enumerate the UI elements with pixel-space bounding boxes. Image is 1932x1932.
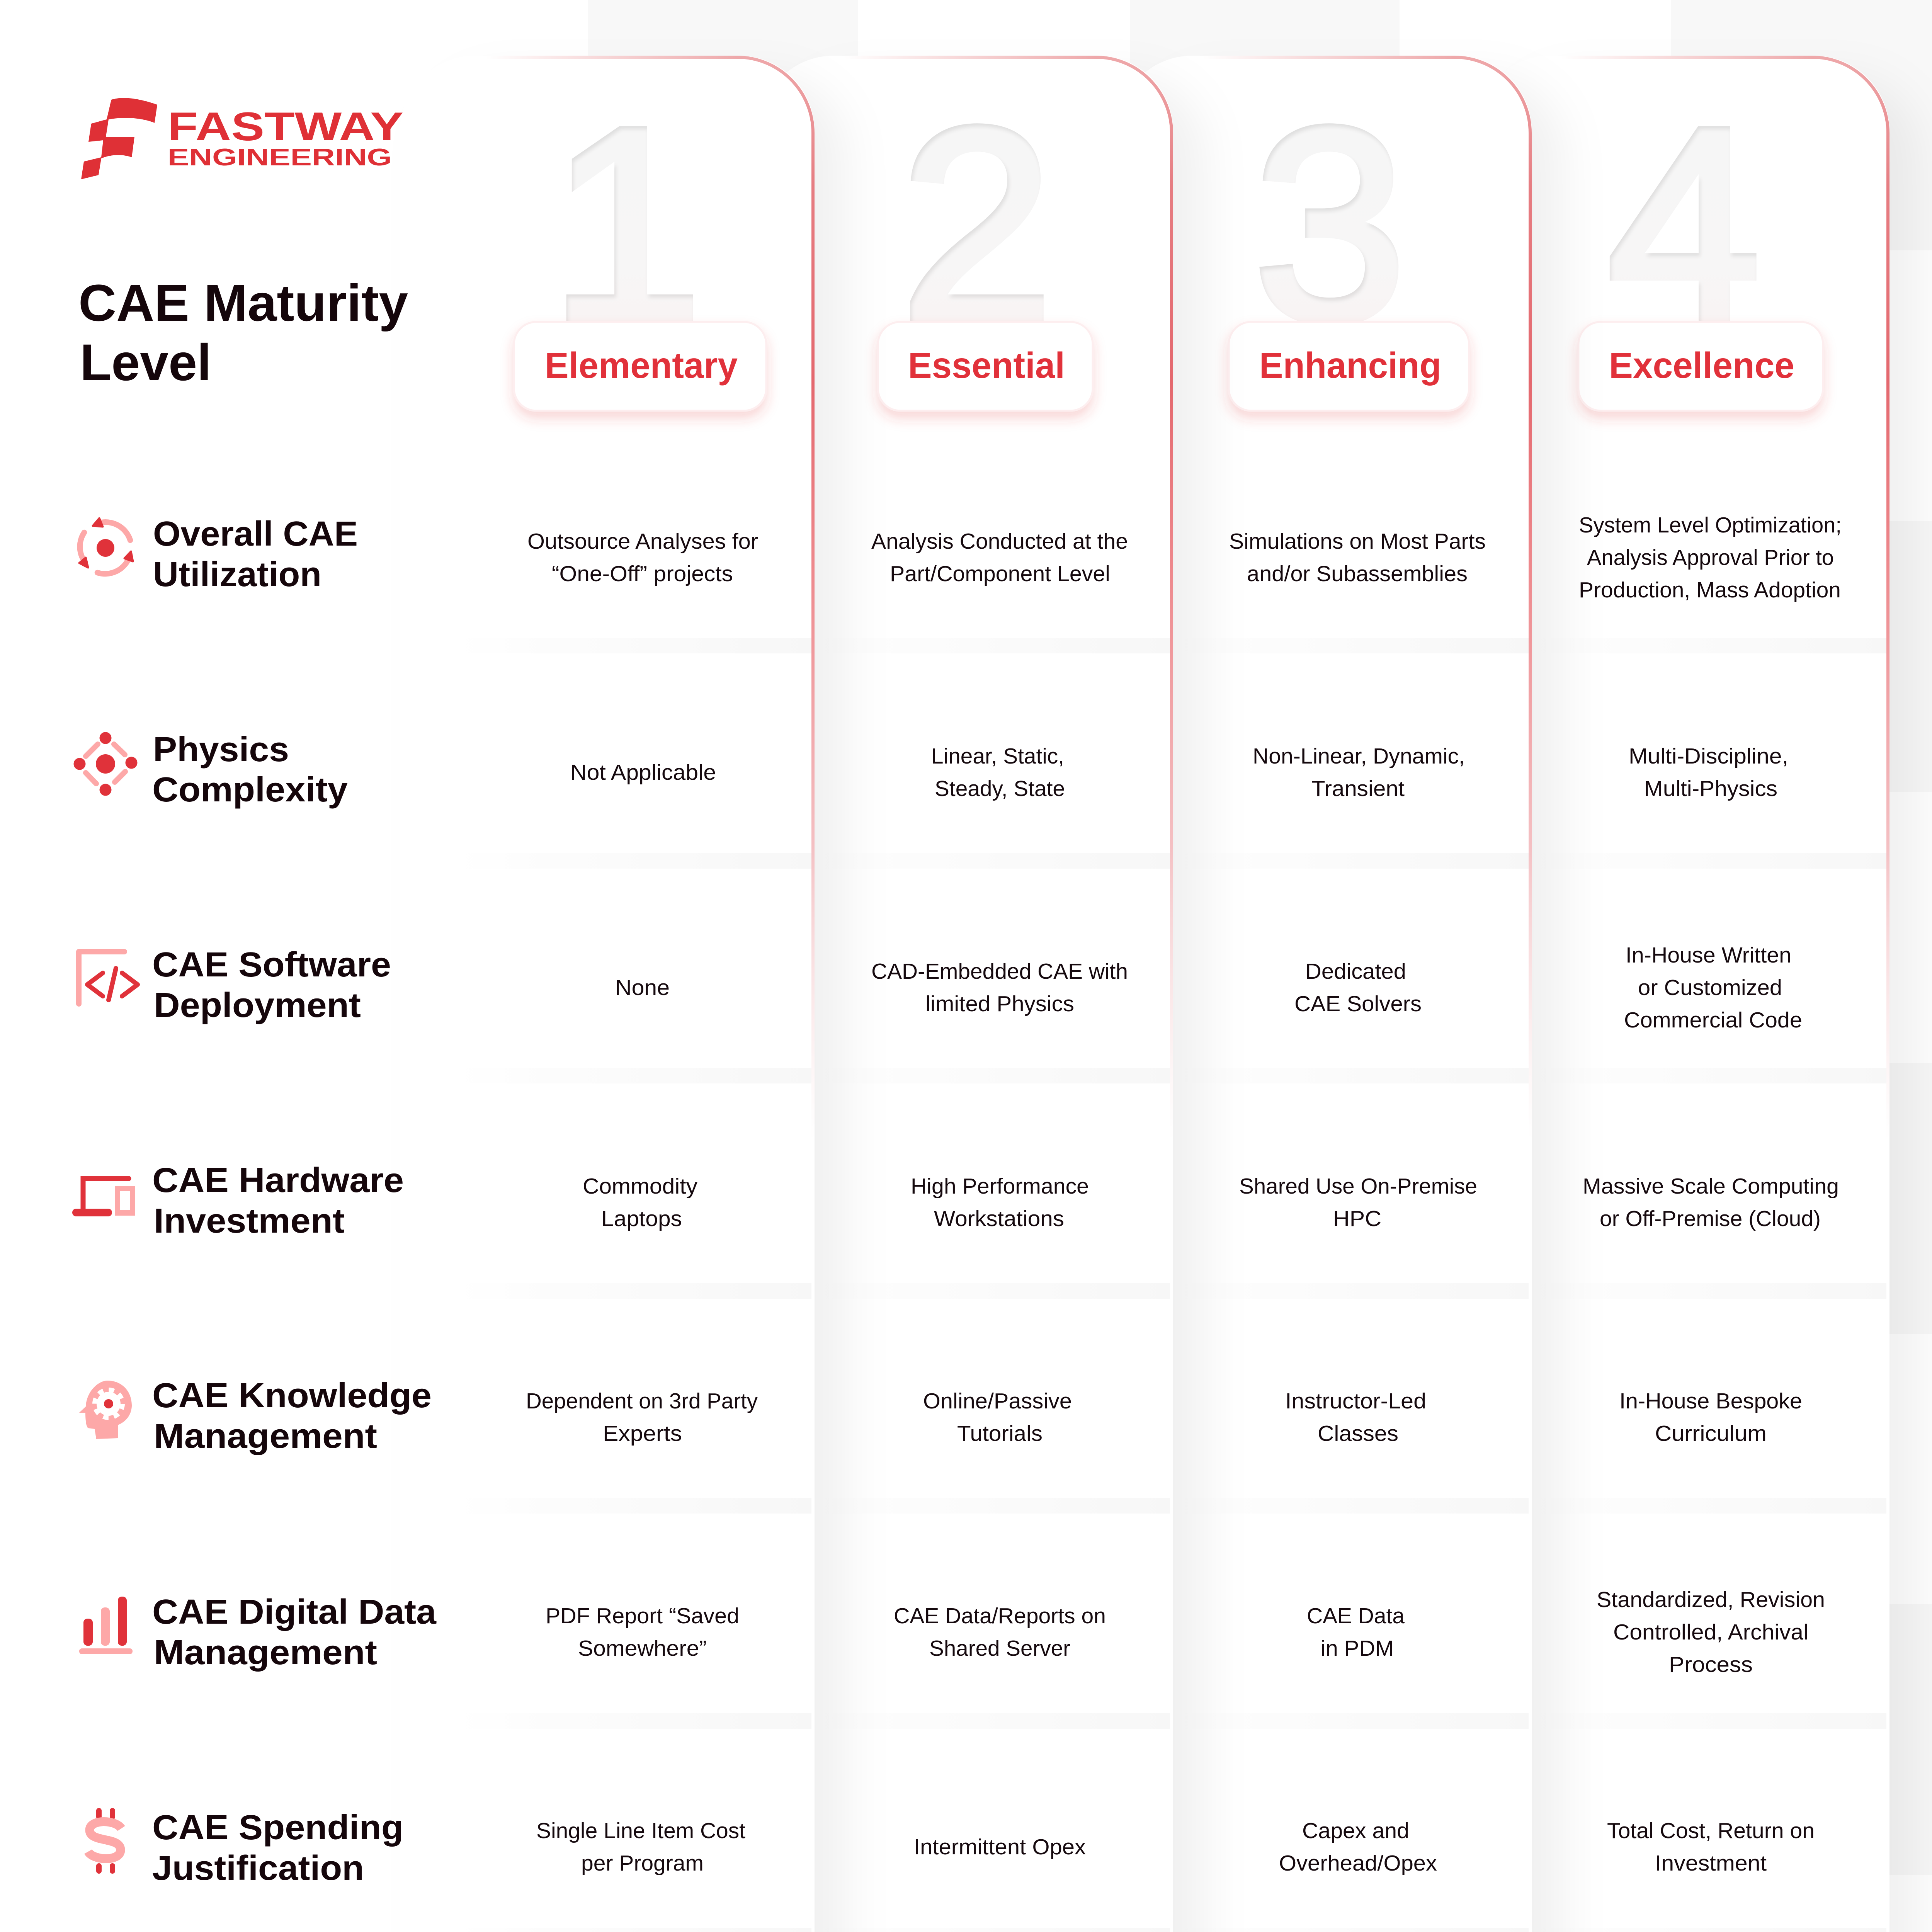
cell: elementary spending: Single Line Item Cost bbox=[536, 1818, 745, 1843]
icon: head with gear bbox=[79, 1381, 132, 1439]
cell: essential hardware bbox=[911, 1174, 1089, 1231]
label: CAE Hardware bbox=[152, 1161, 404, 1200]
cell: excellence utilization bbox=[1579, 513, 1842, 602]
cell: elementary utilization: “One-Off” projects bbox=[552, 561, 733, 586]
cell: excellence utilization: Analysis Approval Prior to bbox=[1587, 545, 1834, 570]
badge: Elementary: Elementary bbox=[545, 345, 738, 386]
cell: essential spending: Intermittent Opex bbox=[914, 1835, 1086, 1859]
cell: excellence data: Controlled, Archival bbox=[1613, 1620, 1808, 1645]
cell: elementary knowledge: Dependent on 3rd Party bbox=[526, 1389, 758, 1413]
cell: excellence data: Process bbox=[1669, 1652, 1753, 1677]
cell: excellence software: In-House Written bbox=[1626, 943, 1791, 968]
cell: excellence physics bbox=[1629, 744, 1788, 801]
cell: essential data: CAE Data/Reports on bbox=[894, 1604, 1106, 1628]
label: Physics bbox=[153, 730, 289, 769]
label bbox=[152, 1808, 403, 1888]
cell: enhancing data: CAE Data bbox=[1307, 1604, 1405, 1628]
badge: Elementary bbox=[514, 322, 766, 411]
cell: enhancing knowledge: Classes bbox=[1318, 1421, 1398, 1446]
cell: excellence physics: Multi-Discipline, bbox=[1629, 744, 1788, 769]
cell: essential knowledge bbox=[923, 1389, 1072, 1446]
cell: enhancing software bbox=[1294, 959, 1422, 1016]
row: Physics Complexity bbox=[73, 730, 348, 809]
icon: bar chart bbox=[79, 1597, 133, 1654]
label bbox=[152, 730, 348, 809]
cell: enhancing spending bbox=[1279, 1818, 1437, 1876]
label bbox=[153, 515, 358, 594]
cell: enhancing utilization: Simulations on Most Parts bbox=[1229, 529, 1486, 554]
cell: essential physics bbox=[931, 744, 1065, 801]
numeral 2: 2 bbox=[901, 71, 1053, 378]
panel: level 2 Essential column bbox=[759, 56, 1173, 1932]
title bbox=[78, 274, 408, 391]
icon: code window bbox=[79, 952, 138, 1004]
cell: elementary data: PDF Report “Saved bbox=[546, 1604, 739, 1628]
cell: excellence utilization: Production, Mass Adoption bbox=[1579, 578, 1841, 602]
cell: excellence data bbox=[1597, 1587, 1825, 1677]
label bbox=[152, 1376, 432, 1456]
cell: essential physics: Linear, Static, bbox=[931, 744, 1064, 769]
cell: enhancing utilization bbox=[1229, 529, 1486, 586]
cell: enhancing software: Dedicated bbox=[1305, 959, 1406, 984]
badge: Enhancing bbox=[1229, 322, 1469, 411]
row: CAE Spending Justification bbox=[88, 1808, 403, 1888]
label: CAE Spending bbox=[152, 1808, 403, 1847]
icon: flag bbox=[81, 98, 157, 179]
panel: level 1 Elementary column bbox=[400, 56, 815, 1932]
cell: enhancing utilization: and/or Subassemblies bbox=[1247, 561, 1468, 586]
label: CAE Knowledge bbox=[152, 1376, 432, 1415]
cell: enhancing data: in PDM bbox=[1321, 1636, 1394, 1661]
cell: enhancing physics: Non-Linear, Dynamic, bbox=[1253, 744, 1465, 769]
cell: essential data: Shared Server bbox=[929, 1636, 1070, 1661]
cell: elementary hardware bbox=[583, 1174, 698, 1231]
cell: essential knowledge: Tutorials bbox=[957, 1421, 1043, 1446]
cell: enhancing physics bbox=[1253, 744, 1465, 801]
cell: essential utilization bbox=[871, 529, 1128, 586]
badge: Essential bbox=[878, 322, 1093, 411]
cell: elementary data bbox=[546, 1604, 739, 1661]
cell: excellence hardware: Massive Scale Computing bbox=[1583, 1174, 1839, 1199]
cell: elementary spending: per Program bbox=[581, 1851, 704, 1876]
cell: excellence software bbox=[1624, 943, 1802, 1032]
cell: elementary spending bbox=[536, 1818, 745, 1876]
row: CAE Software Deployment bbox=[79, 946, 391, 1025]
badge: Enhancing: Enhancing bbox=[1259, 345, 1441, 386]
badge: Excellence bbox=[1578, 322, 1823, 411]
icon: cycle target bbox=[79, 518, 133, 574]
cell: excellence software: Commercial Code bbox=[1624, 1008, 1802, 1032]
cell: excellence utilization: System Level Optimization; bbox=[1579, 513, 1842, 537]
background checker pattern bbox=[588, 0, 1932, 1932]
card 1 background bbox=[400, 56, 815, 1932]
logo wordmark: ENGINEERING bbox=[168, 144, 392, 171]
cell: essential utilization: Part/Component Level bbox=[890, 561, 1110, 586]
cell: excellence hardware: or Off-Premise (Cloud) bbox=[1600, 1206, 1821, 1231]
cell: enhancing knowledge: Instructor-Led bbox=[1285, 1389, 1426, 1413]
label: CAE Software bbox=[152, 946, 391, 984]
label: Management bbox=[154, 1417, 377, 1456]
cell: enhancing hardware: HPC bbox=[1333, 1206, 1381, 1231]
numeral 3: 3 bbox=[1254, 71, 1406, 378]
label bbox=[152, 1593, 437, 1672]
cell: elementary knowledge bbox=[526, 1389, 758, 1446]
label: CAE Digital Data bbox=[152, 1593, 437, 1631]
panel: level 3 Enhancing column bbox=[1117, 56, 1532, 1932]
label: Management bbox=[154, 1633, 377, 1672]
cell: excellence physics: Multi-Physics bbox=[1644, 776, 1777, 801]
label: Investment bbox=[154, 1202, 345, 1240]
cell: elementary hardware: Commodity bbox=[583, 1174, 698, 1199]
cell: enhancing knowledge bbox=[1285, 1389, 1426, 1446]
label: Utilization bbox=[153, 555, 321, 594]
cell: enhancing software: CAE Solvers bbox=[1294, 992, 1422, 1016]
cell: excellence software: or Customized bbox=[1638, 975, 1782, 1000]
numeral 4: 4 bbox=[1608, 71, 1760, 378]
badge: Excellence: Excellence bbox=[1609, 345, 1794, 386]
cell: elementary hardware: Laptops bbox=[601, 1206, 682, 1231]
cell: enhancing data bbox=[1307, 1604, 1405, 1661]
icon: laptop and tablet bbox=[76, 1179, 133, 1213]
card 3 background bbox=[1117, 56, 1532, 1932]
cell: essential knowledge: Online/Passive bbox=[923, 1389, 1072, 1413]
cell: excellence hardware bbox=[1583, 1174, 1839, 1231]
label: Justification bbox=[152, 1849, 364, 1888]
cell: excellence data: Standardized, Revision bbox=[1597, 1587, 1825, 1612]
cell: excellence spending: Total Cost, Return on bbox=[1607, 1818, 1815, 1843]
cell: enhancing hardware bbox=[1239, 1174, 1477, 1231]
cell: elementary physics: Not Applicable bbox=[570, 760, 716, 785]
cell: essential hardware: High Performance bbox=[911, 1174, 1089, 1199]
cell: essential utilization: Analysis Conducted at the bbox=[871, 529, 1128, 554]
row: CAE Hardware Investment bbox=[76, 1161, 404, 1240]
cell: excellence spending: Investment bbox=[1655, 1851, 1767, 1876]
cell: excellence knowledge: Curriculum bbox=[1655, 1421, 1767, 1446]
cell: elementary software: None bbox=[615, 975, 670, 1000]
label bbox=[152, 1161, 404, 1240]
logo wordmark bbox=[168, 104, 403, 171]
cell: essential software: CAD-Embedded CAE with bbox=[871, 959, 1128, 984]
logo: Fastway Engineering bbox=[81, 98, 403, 179]
badge: Essential: Essential bbox=[908, 345, 1065, 386]
cell: enhancing spending: Overhead/Opex bbox=[1279, 1851, 1437, 1876]
cell: essential software bbox=[871, 959, 1128, 1016]
cell: essential physics: Steady, State bbox=[935, 776, 1065, 801]
cell: essential software: limited Physics bbox=[925, 992, 1074, 1016]
title: CAE Maturity bbox=[78, 274, 408, 332]
cell: elementary data: Somewhere” bbox=[578, 1636, 707, 1661]
cell: elementary knowledge: Experts bbox=[603, 1421, 682, 1446]
cell: essential data bbox=[894, 1604, 1106, 1661]
logo wordmark: FASTWAY bbox=[168, 104, 403, 149]
panel: level 4 Excellence column bbox=[1475, 56, 1889, 1932]
row: CAE Knowledge Management bbox=[79, 1376, 432, 1456]
row: CAE Digital Data Management bbox=[79, 1593, 437, 1672]
label bbox=[152, 946, 391, 1025]
cell: excellence spending bbox=[1607, 1818, 1815, 1876]
title: Level bbox=[80, 334, 211, 391]
label: Overall CAE bbox=[153, 515, 358, 553]
cell: excellence knowledge bbox=[1619, 1389, 1802, 1446]
card 4 background bbox=[1475, 56, 1889, 1932]
cell: excellence knowledge: In-House Bespoke bbox=[1619, 1389, 1802, 1413]
cell: elementary utilization: Outsource Analyses for bbox=[527, 529, 758, 554]
numeral 1: 1 bbox=[550, 71, 702, 378]
label: Deployment bbox=[154, 986, 361, 1025]
icon: dollar bbox=[88, 1811, 121, 1871]
label: Complexity bbox=[152, 770, 348, 809]
cell: enhancing spending: Capex and bbox=[1302, 1818, 1409, 1843]
icon: network diamond bbox=[73, 732, 138, 796]
cell: enhancing physics: Transient bbox=[1311, 776, 1405, 801]
cell: essential hardware: Workstations bbox=[934, 1206, 1064, 1231]
cell: enhancing hardware: Shared Use On-Premise bbox=[1239, 1174, 1477, 1199]
cell: elementary utilization bbox=[527, 529, 758, 586]
card 2 background bbox=[759, 56, 1173, 1932]
row: Overall CAE Utilization bbox=[79, 515, 358, 594]
